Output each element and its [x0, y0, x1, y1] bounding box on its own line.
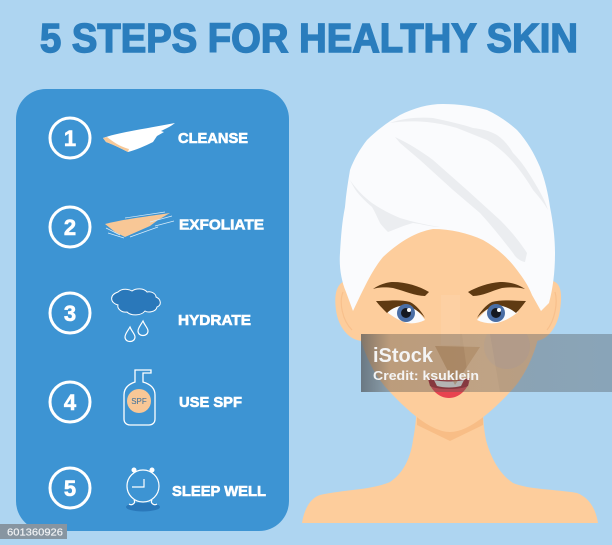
- step 4: use spf: 4: [64, 390, 77, 415]
- face: [356, 225, 542, 432]
- step 5: sleep well: SLEEP WELL: [172, 483, 266, 500]
- watermark band: [361, 334, 612, 392]
- step 3: hydrate: [50, 289, 251, 342]
- step 5: sleep well: [50, 468, 266, 512]
- watermark credit: Credit: ksuklein: [373, 369, 479, 383]
- step 3: hydrate: 3: [64, 301, 76, 326]
- step 1: cleanse: [50, 118, 248, 158]
- ears: [335, 281, 561, 341]
- neck and shoulders: [302, 405, 598, 523]
- step 4: use spf: USE SPF: [179, 394, 242, 411]
- panel: five steps: [16, 89, 289, 531]
- neck shadow: [417, 415, 483, 441]
- eyes: [376, 300, 526, 323]
- step 2: exfoliate: EXFOLIATE: [179, 216, 264, 234]
- towel fold: diagonal: [395, 137, 527, 262]
- step 4: use spf: [50, 370, 242, 425]
- step 2: exfoliate: 2: [64, 215, 76, 240]
- towel: [340, 104, 555, 311]
- step 4: use spf: SPF: [131, 397, 147, 406]
- watermark text: iStock: [373, 344, 434, 367]
- ear shadows: [341, 292, 556, 330]
- step 5: sleep well: 5: [64, 476, 76, 501]
- illustration: woman with towel: [302, 104, 598, 523]
- step 3: hydrate: HYDRATE: [178, 312, 251, 329]
- step 2: exfoliate: [50, 207, 264, 247]
- towel fold: left: [350, 180, 440, 232]
- step 1: cleanse: CLEANSE: [178, 130, 248, 147]
- image id badge: [0, 524, 67, 539]
- mouth: [428, 378, 470, 398]
- image id badge: 601360926: [7, 526, 63, 538]
- step 1: cleanse: 1: [64, 126, 76, 151]
- towel fold: top: [390, 118, 548, 210]
- nose highlight: [441, 295, 460, 345]
- eyebrows: [373, 282, 525, 296]
- title: 5 STEPS FOR HEALTHY SKIN: [40, 15, 578, 61]
